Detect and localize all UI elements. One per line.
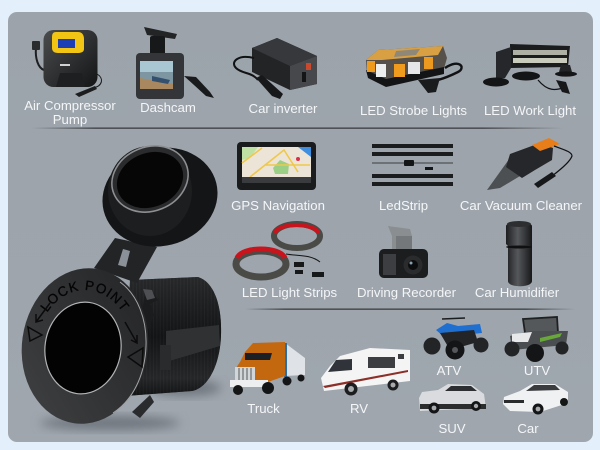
label: car inverter: Car inverter bbox=[249, 101, 318, 116]
cap cup bbox=[108, 146, 192, 236]
cap strap bbox=[94, 238, 157, 283]
label: air compressor pump: Air Compressor bbox=[24, 98, 116, 113]
icon: ATV quad bike bbox=[424, 318, 488, 360]
icon: LED work light bbox=[483, 44, 577, 94]
icon: dashcam bbox=[136, 27, 214, 99]
icon: LED strip set bbox=[372, 144, 453, 186]
icon: RV motorhome bbox=[321, 348, 410, 396]
icon: GPS navigator bbox=[237, 142, 316, 190]
icon: UTV side-by-side bbox=[504, 317, 568, 362]
label: LedStrip: LedStrip bbox=[379, 198, 428, 213]
icon: LED strobe light bar bbox=[366, 46, 462, 93]
label: UTV: UTV bbox=[524, 363, 550, 378]
label: driving recorder: Driving Recorder bbox=[357, 285, 457, 300]
socket opening bbox=[39, 297, 127, 399]
icon: air compressor bbox=[32, 30, 102, 97]
lock point label: LOCK POINT bbox=[40, 280, 130, 312]
socket front flange bbox=[12, 260, 158, 432]
label: car: Car bbox=[517, 421, 539, 436]
icon: driving recorder bbox=[379, 226, 428, 278]
label: LED work light: LED Work Light bbox=[484, 103, 576, 118]
cap outer rim bbox=[92, 135, 228, 259]
label: GPS navigation: GPS Navigation bbox=[231, 198, 325, 213]
icon: car vacuum cleaner bbox=[487, 138, 572, 190]
icon: SUV bbox=[419, 384, 486, 414]
label: car humidifier: Car Humidifier bbox=[475, 285, 560, 300]
label: car vacuum cleaner: Car Vacuum Cleaner bbox=[460, 198, 583, 213]
label: ATV: ATV bbox=[437, 363, 462, 378]
label: LED light strips: LED Light Strips bbox=[242, 285, 338, 300]
lock arrows bbox=[28, 303, 143, 367]
label: truck: Truck bbox=[247, 401, 280, 416]
product: locking cigarette socket with cap bbox=[22, 145, 222, 434]
top divider bbox=[32, 128, 562, 129]
icon: LED light strip reels bbox=[236, 224, 324, 277]
icon: truck bbox=[230, 342, 305, 395]
icon: car humidifier bbox=[506, 221, 532, 286]
label: dashcam: Dashcam bbox=[140, 100, 196, 115]
threaded cylinder body bbox=[125, 277, 221, 418]
label: air compressor pump: Pump bbox=[53, 112, 87, 127]
icon: car inverter bbox=[234, 38, 317, 99]
label: LED strobe lights: LED Strobe Lights bbox=[360, 103, 467, 118]
bottom divider bbox=[245, 308, 575, 310]
label: SUV: SUV bbox=[438, 421, 466, 436]
icon: sedan car bbox=[503, 384, 568, 414]
label: RV: RV bbox=[350, 401, 368, 416]
